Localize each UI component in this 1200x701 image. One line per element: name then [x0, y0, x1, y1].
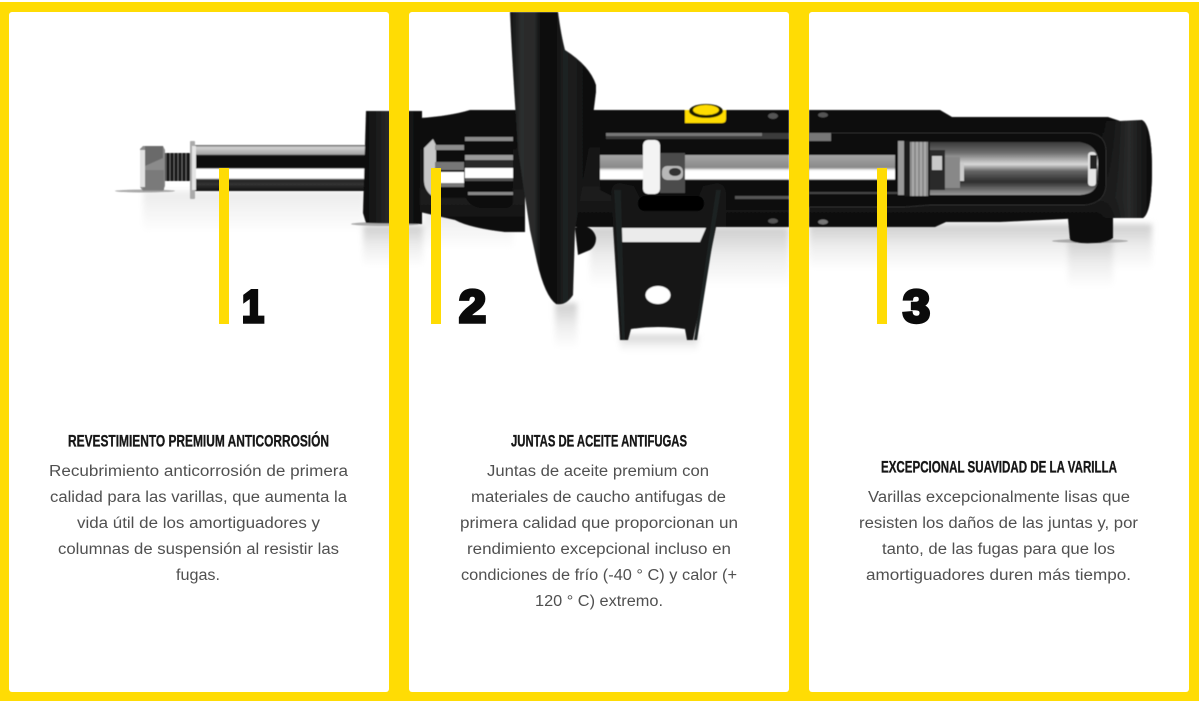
- middle cutaway window: [600, 113, 789, 224]
- text block: oil seals: materiales de caucho antifugas de: [471, 489, 726, 506]
- shock absorber illustration: [115, 12, 1152, 352]
- callout line 3: [877, 168, 887, 324]
- right end cap shading: [1095, 121, 1152, 218]
- text block: oil seals: [460, 463, 738, 610]
- callout line 2: [431, 168, 441, 324]
- spring seat disc: [510, 12, 596, 304]
- panel: oil seals: [409, 12, 789, 692]
- callout number 2: 2: [459, 281, 486, 332]
- text block: rod smoothness: resisten los daños de las juntas y, por: [859, 515, 1138, 532]
- piston rod: [195, 145, 365, 191]
- white seal ring: [643, 140, 660, 194]
- piston valve stack: [898, 141, 904, 195]
- pressure tube: [929, 141, 1099, 196]
- right body section: [809, 110, 1152, 227]
- text block: oil seals: condiciones de frío (-40 ° C) y calor (+: [461, 567, 737, 584]
- threaded stud: [163, 153, 191, 181]
- logo tag: [685, 104, 726, 123]
- heading: oil seals: JUNTAS DE ACEITE ANTIFUGAS: [511, 432, 687, 450]
- heading: anticorrosion: REVESTIMIENTO PREMIUM ANTICORROSIÓN: [68, 432, 329, 450]
- text block: rod smoothness: tanto, de las fugas para que los: [882, 541, 1115, 558]
- text block: rod smoothness: [859, 489, 1138, 584]
- text block: oil seals: primera calidad que proporcionan un: [460, 515, 738, 532]
- lower mounting lug: [1068, 218, 1113, 243]
- text block: rod smoothness: amortiguadores duren más tiempo.: [866, 567, 1131, 584]
- left body section: [420, 110, 525, 232]
- text block: anticorrosion: [49, 463, 348, 584]
- text block: rod smoothness: Varillas excepcionalmente lisas que: [868, 489, 1130, 506]
- panel: rod smoothness: [809, 12, 1189, 692]
- text block: anticorrosion: vida útil de los amortiguadores y: [77, 515, 320, 532]
- callout number 1: 1: [242, 281, 264, 332]
- hex nut: [140, 146, 165, 191]
- top mount collar: [363, 111, 422, 224]
- washer: [190, 141, 196, 199]
- text block: anticorrosion: columnas de suspensión al resistir las: [58, 541, 339, 558]
- text block: oil seals: 120 ° C) extremo.: [535, 593, 663, 610]
- panel: anticorrosion: [9, 12, 389, 692]
- main body: [560, 110, 789, 227]
- floor reflections: [143, 191, 1152, 352]
- text block: oil seals: rendimiento excepcional incluso en: [467, 541, 731, 558]
- left cutaway window: [423, 136, 514, 208]
- callout number 3: 3: [903, 281, 930, 332]
- text block: anticorrosion: Recubrimiento anticorrosión de primera: [49, 463, 348, 480]
- text block: anticorrosion: calidad para las varillas, que aumenta la: [50, 489, 347, 506]
- seal collar: [660, 153, 685, 193]
- contact shadows: [115, 190, 1128, 243]
- text block: oil seals: Juntas de aceite premium con: [487, 463, 709, 480]
- callout line 1: [219, 168, 229, 324]
- mounting bracket: [611, 183, 726, 340]
- right cutaway window: [809, 112, 1106, 224]
- text block: anticorrosion: fugas.: [176, 567, 220, 584]
